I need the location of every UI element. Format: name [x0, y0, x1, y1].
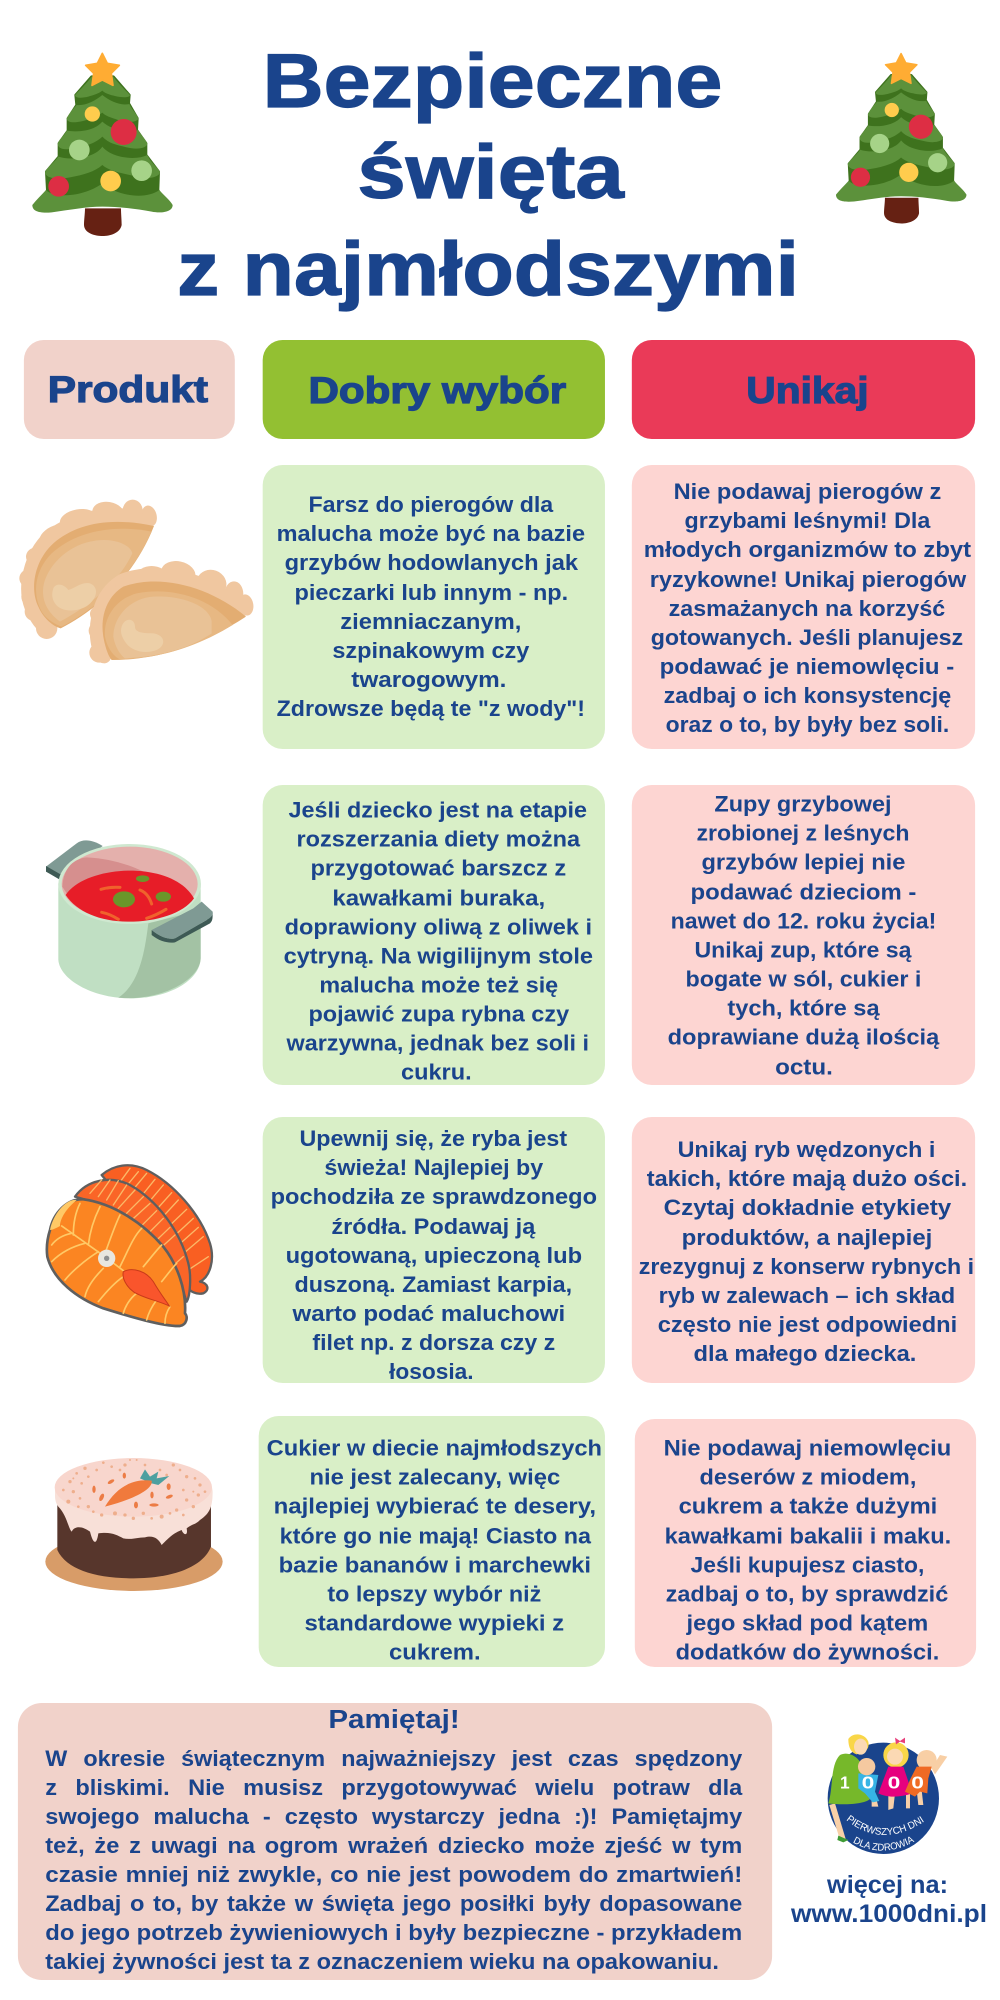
panel: pierogi good choice: szpinakowym czy	[332, 638, 530, 663]
panel: cake good choice: najlepiej wybierać te desery,	[274, 1493, 596, 1519]
remember text: Zadbaj o to, by także w święta jego posiłki były dopasowane	[45, 1891, 742, 1916]
panel: cake avoid: jego skład pod kątem	[685, 1610, 928, 1636]
panel: soup good choice	[263, 785, 605, 1085]
logo: 1000 pierwszych dni	[828, 1734, 948, 1854]
panel: fish good choice: źródła. Podawaj ją	[331, 1214, 536, 1239]
column header: Dobry wybór: Dobry wybór	[308, 370, 566, 411]
panel: soup good choice: pojawić zupa rybna czy	[308, 1001, 570, 1027]
icon: carrot cake	[45, 1458, 223, 1591]
panel: pierogi avoid: zadbaj o ich konsystencję	[664, 683, 951, 708]
panel: fish good choice: filet np. z dorsza czy z	[312, 1330, 555, 1355]
panel: soup good choice: cukru.	[401, 1059, 472, 1085]
panel: pierogi avoid: podawać je niemowlęciu -	[660, 654, 954, 679]
panel: pierogi good choice: Farsz do pierogów dla	[308, 492, 554, 517]
panel: pierogi good choice: twarogowym.	[351, 667, 506, 692]
panel: soup good choice: Jeśli dziecko jest na etapie	[289, 797, 587, 823]
logo caption: PIERWSZYCH DNI	[846, 1815, 924, 1835]
panel: cake good choice: które go nie mają! Ciasto na	[280, 1523, 592, 1549]
panel: soup good choice: doprawiony oliwą z oliwek i	[285, 914, 592, 940]
icon: soup pot	[46, 840, 213, 998]
remember text: swojego malucha - często wystarczy jedna :)! Pamiętajmy	[45, 1804, 743, 1829]
panel: fish good choice: Upewnij się, że ryba jest	[299, 1126, 568, 1151]
panel: fish good choice	[263, 1117, 605, 1384]
panel: pierogi good choice: ziemniaczanym,	[340, 609, 521, 634]
panel: cake avoid: Jeśli kupujesz ciasto,	[691, 1552, 924, 1578]
title	[177, 39, 799, 312]
panel: remember	[18, 1703, 772, 1980]
logo digits: 0	[888, 1772, 900, 1792]
remember text: czasie mniej niż zwykle, co nie jest powodem do zmartwień!	[45, 1862, 742, 1887]
panel: pierogi avoid: młodych organizmów to zbyt	[644, 537, 972, 562]
panel: fish avoid: Unikaj ryb wędzonych i	[678, 1137, 935, 1162]
panel: cake avoid: Nie podawaj niemowlęciu	[664, 1435, 951, 1461]
panel: pierogi avoid: grzybami leśnymi! Dla	[685, 508, 931, 533]
panel: pierogi good choice: grzybów hodowlanych jak	[285, 550, 579, 575]
logo digits: 1	[840, 1772, 850, 1792]
panel: cake avoid: dodatków do żywności.	[676, 1639, 939, 1665]
panel: cake good choice: to lepszy wybór niż	[327, 1581, 541, 1607]
panel: fish good choice: łososia.	[389, 1359, 474, 1384]
panel: fish good choice: warto podać maluchowi	[291, 1301, 565, 1326]
panel: cake avoid: kawałkami bakalii i maku.	[665, 1523, 951, 1549]
panel: fish avoid: dla małego dziecka.	[694, 1341, 916, 1366]
link: more at 1000dni.pl	[790, 1871, 987, 1928]
logo caption	[846, 1815, 924, 1851]
panel: cake good choice: nie jest zalecany, więc	[309, 1464, 560, 1490]
panel: cake avoid: deserów z miodem,	[699, 1464, 916, 1490]
icon: salmon steaks	[47, 1165, 212, 1326]
logo digits	[840, 1772, 924, 1792]
column header: Dobry wybór	[263, 340, 605, 439]
panel: pierogi good choice: pieczarki lub innym - np.	[295, 580, 568, 605]
panel: soup good choice: przygotować barszcz z	[310, 855, 566, 881]
panel: soup good choice: warzywna, jednak bez soli i	[285, 1030, 589, 1056]
panel: cake good choice: bazie bananów i marchewki	[279, 1552, 591, 1578]
panel: cake good choice: Cukier w diecie najmłodszych	[267, 1435, 602, 1461]
panel: cake good choice	[259, 1416, 605, 1667]
panel: soup avoid: Zupy grzybowej	[714, 791, 892, 817]
panel: cake good choice: cukrem.	[389, 1639, 481, 1665]
panel: fish avoid: często nie jest odpowiedni	[658, 1312, 957, 1337]
panel: soup good choice: rozszerzania diety można	[297, 826, 581, 852]
panel: soup avoid	[632, 785, 975, 1085]
panel: pierogi avoid: oraz o to, by były bez soli.	[666, 712, 949, 737]
remember text: takiej żywności jest ta z oznaczeniem wieku na opakowaniu.	[45, 1949, 719, 1974]
panel: soup avoid: octu.	[775, 1054, 833, 1080]
column header: Unikaj: Unikaj	[746, 370, 869, 411]
title: Bezpieczne	[263, 39, 722, 124]
panel: pierogi good choice: malucha może być na bazie	[277, 521, 585, 546]
panel: soup good choice: cytryną. Na wigilijnym stole	[284, 943, 593, 969]
panel: cake avoid: zadbaj o to, by sprawdzić	[666, 1581, 948, 1607]
column header: Unikaj	[632, 340, 975, 439]
panel: fish good choice: świeża! Najlepiej by	[324, 1155, 544, 1180]
logo digits: 0	[911, 1772, 924, 1792]
panel: soup avoid: podawać dzieciom -	[691, 879, 916, 905]
panel: fish avoid: Czytaj dokładnie etykiety	[664, 1195, 952, 1220]
logo caption: DLA ZDROWIA	[853, 1836, 914, 1851]
column header: Produkt: Produkt	[48, 369, 208, 410]
panel: soup avoid: tych, które są	[727, 995, 880, 1021]
panel: pierogi avoid: Nie podawaj pierogów z	[674, 479, 941, 504]
panel: pierogi avoid: zasmażanych na korzyść	[669, 596, 945, 621]
remember text: do jego potrzeb żywieniowych i były bezpieczne - przykładem	[45, 1920, 742, 1945]
panel: fish good choice: duszoną. Zamiast karpia,	[295, 1272, 572, 1297]
icon: christmas tree left	[32, 53, 173, 236]
remember text: z bliskimi. Nie musisz przygotowywać wielu potraw dla	[45, 1775, 743, 1800]
panel: pierogi good choice	[263, 465, 605, 749]
remember text	[45, 1746, 743, 1974]
panel: cake good choice: standardowe wypieki z	[304, 1610, 564, 1636]
panel: fish good choice: pochodziła ze sprawdzonego	[271, 1184, 597, 1209]
logo digits: 0	[862, 1772, 874, 1792]
panel: soup avoid: nawet do 12. roku życia!	[671, 908, 936, 934]
heading: Pamiętaj: Pamiętaj!	[328, 1706, 460, 1734]
panel: cake avoid	[635, 1419, 976, 1667]
panel: pierogi good choice: Zdrowsze będą te "z wody"!	[277, 696, 585, 721]
panel: fish avoid: produktów, a najlepiej	[682, 1225, 932, 1250]
panel: pierogi avoid	[632, 465, 975, 749]
panel: fish avoid: takich, które mają dużo ości.	[647, 1166, 967, 1191]
panel: fish avoid: ryb w zalewach – ich skład	[659, 1283, 955, 1308]
panel: cake avoid: cukrem a także dużymi	[679, 1493, 937, 1519]
title: święta	[357, 130, 625, 215]
link: more at 1000dni.pl: więcej na:	[826, 1871, 948, 1899]
icon: christmas tree right	[836, 54, 966, 223]
panel: fish good choice: ugotowaną, upieczoną lub	[286, 1243, 582, 1268]
panel: soup avoid: doprawiane dużą ilością	[668, 1024, 940, 1050]
panel: soup good choice: malucha może też się	[319, 972, 558, 998]
panel: fish avoid: zrezygnuj z konserw rybnych i	[639, 1254, 974, 1279]
panel: pierogi avoid: ryzykowne! Unikaj pierogów	[650, 567, 967, 592]
remember text: W okresie świątecznym najważniejszy jest czas spędzony	[45, 1746, 743, 1771]
icon: pierogi	[19, 499, 255, 663]
remember text: też, że z uwagi na ogrom wrażeń dziecko może zjeść w tym	[45, 1833, 742, 1858]
title: z najmłodszymi	[177, 227, 799, 312]
panel: soup avoid: bogate w sól, cukier i	[686, 966, 921, 992]
link: more at 1000dni.pl: www.1000dni.pl	[790, 1900, 987, 1928]
panel: soup good choice: kawałkami buraka,	[332, 885, 545, 911]
column header: Produkt	[24, 340, 235, 439]
panel: fish avoid	[632, 1117, 975, 1383]
panel: soup avoid: grzybów lepiej nie	[701, 849, 905, 875]
panel: soup avoid: zrobionej z leśnych	[696, 820, 909, 846]
panel: soup avoid: Unikaj zup, które są	[695, 937, 912, 963]
panel: pierogi avoid: gotowanych. Jeśli planujesz	[651, 625, 963, 650]
